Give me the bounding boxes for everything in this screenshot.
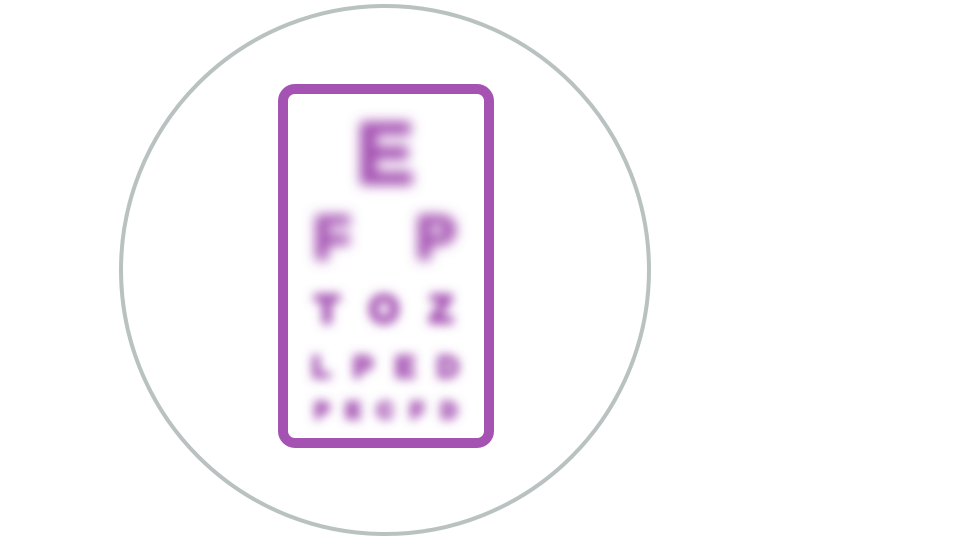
blurred letters: E <box>356 106 414 202</box>
chart border <box>283 89 489 443</box>
eye chart: Z <box>429 289 453 331</box>
eye chart: P <box>315 398 329 423</box>
eye chart: L <box>312 351 330 384</box>
eye chart: E <box>395 351 415 384</box>
eye chart: F <box>410 398 424 423</box>
blurred letters: F <box>314 204 350 271</box>
eye chart: P <box>353 351 373 384</box>
circle frame <box>121 6 649 534</box>
eye chart: O <box>369 289 399 331</box>
eye chart: T <box>315 289 339 331</box>
blurred letters <box>314 106 456 271</box>
eye chart: C <box>377 398 393 423</box>
eye chart: D <box>441 398 457 423</box>
blurred letters: P <box>416 204 456 271</box>
eye chart: D <box>437 351 459 384</box>
eye chart: E <box>346 398 360 423</box>
eye chart <box>283 89 489 443</box>
